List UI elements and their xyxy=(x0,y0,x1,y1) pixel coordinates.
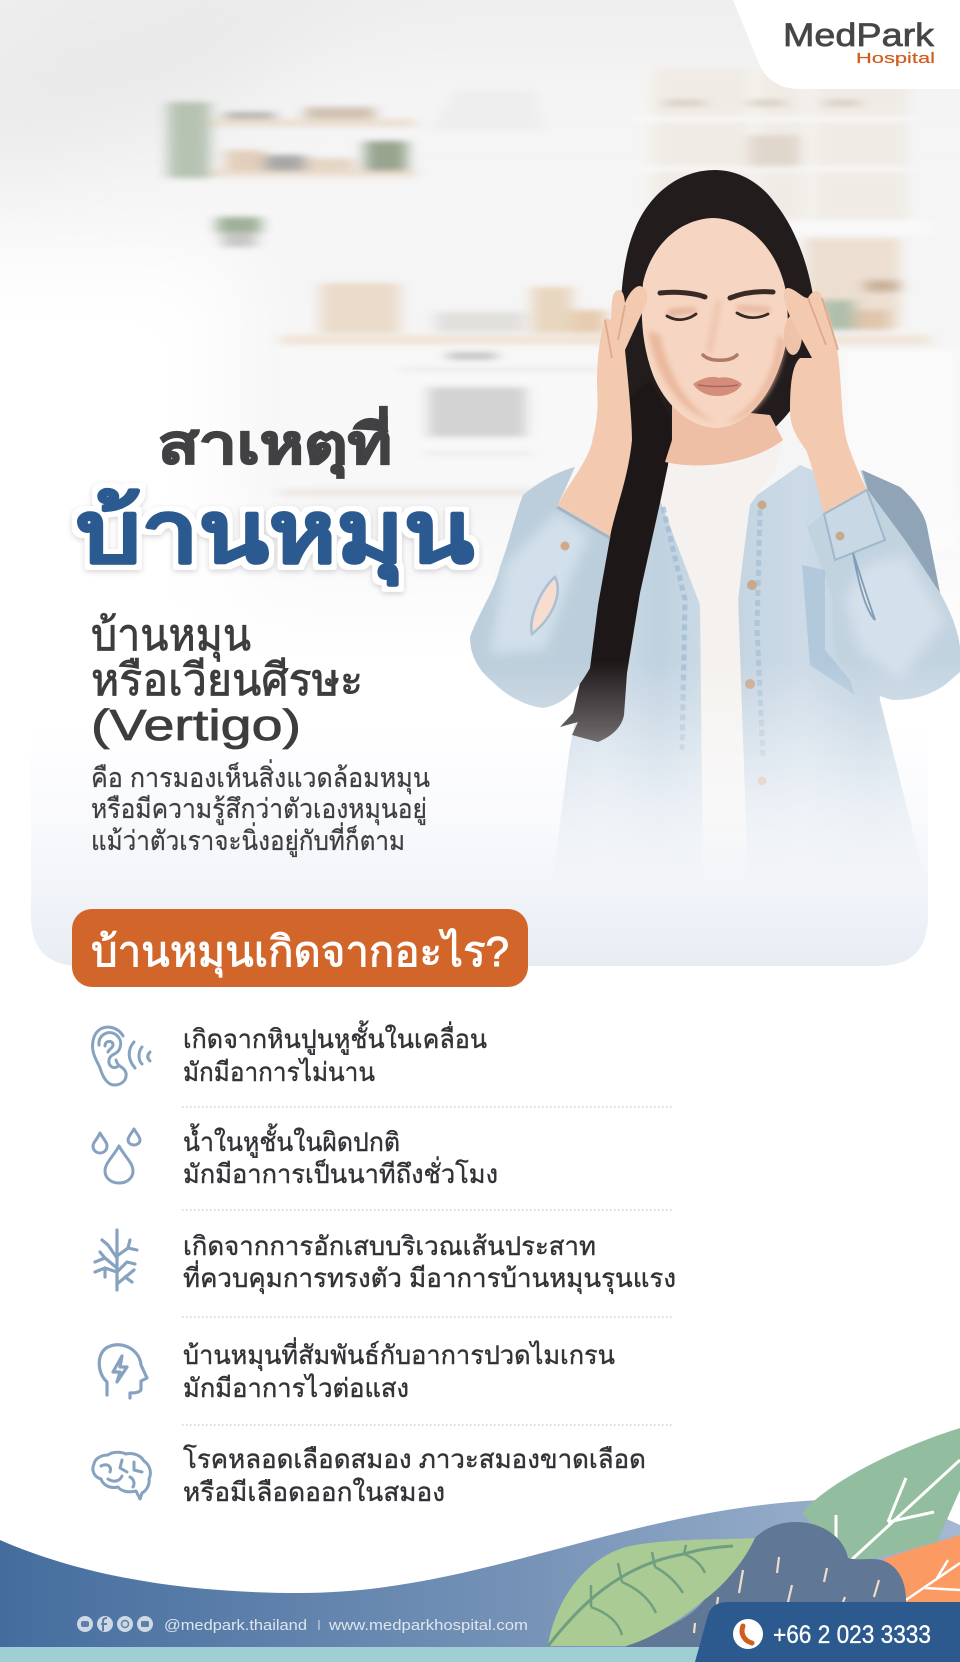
title line: สาเหตุที่: สาเหตุที่ xyxy=(158,406,392,479)
long hair strand xyxy=(560,432,668,742)
section heading: orange pill: บ้านหมุนเกิดจากอะไร? xyxy=(91,928,509,978)
left sleeve opening xyxy=(531,577,558,634)
cause 3 text: เกิดจากการอักเสบบริเวณเส้นประสาท xyxy=(183,1231,596,1261)
white tee xyxy=(660,490,760,830)
white fade over lower background xyxy=(0,480,960,660)
jacket left front xyxy=(550,500,705,900)
lips xyxy=(693,377,742,396)
section heading: orange pill xyxy=(72,909,528,987)
cause 5 text xyxy=(183,1444,646,1507)
social icons xyxy=(77,1616,153,1632)
icon: phone xyxy=(733,1619,763,1649)
right sleeve shadow top xyxy=(862,470,940,593)
cause 2 text: น้ำในหูชั้นในผิดปกติ xyxy=(183,1123,400,1158)
icon: ear with sound waves xyxy=(93,1027,150,1085)
title line: บ้านหมุน: บ้านหมุน xyxy=(76,485,474,586)
phone contact box xyxy=(695,1602,960,1662)
right cuff edge xyxy=(824,490,885,560)
left cuff button xyxy=(560,542,570,550)
definition body text xyxy=(91,759,430,857)
list of causes xyxy=(183,1020,676,1507)
photo: woman holding her temples xyxy=(470,170,960,900)
left cuff edge xyxy=(557,507,610,538)
cause 5 text: หรือมีเลือดออกในสมอง xyxy=(183,1477,445,1507)
footer wave xyxy=(0,1500,960,1662)
cause 1 text xyxy=(183,1020,487,1087)
definition body text: คือ การมองเห็นสิ่งแวดล้อมหมุน xyxy=(91,759,430,795)
eyebrows xyxy=(660,292,773,298)
icon: nerve xyxy=(95,1230,137,1290)
cause 1 text: เกิดจากหินปูนหูชั้นในเคลื่อน xyxy=(183,1020,487,1055)
right sleeve highlight xyxy=(845,555,945,680)
cause 4 text: มักมีอาการไวต่อแสง xyxy=(183,1373,409,1403)
cause 3 text: ที่ควบคุมการทรงตัว มีอาการบ้านหมุนรุนแรง xyxy=(183,1260,676,1294)
icon: head with lightning bolt xyxy=(99,1345,147,1398)
definition heading: บ้านหมุน xyxy=(91,611,251,662)
jacket placket stitching xyxy=(663,507,685,750)
footer decoration: orange leaf xyxy=(882,1535,960,1610)
hand finger shading xyxy=(605,298,838,358)
icon: water drops xyxy=(93,1129,140,1183)
definition heading: (Vertigo) xyxy=(91,701,301,750)
chest pocket xyxy=(802,565,855,695)
right sleeve opening xyxy=(853,553,875,620)
cause 2 text xyxy=(183,1123,498,1189)
website url: www.medparkhospital.com xyxy=(328,1617,528,1634)
definition body text: แม้ว่าตัวเราจะนิ่งอยู่กับที่ก็ตาม xyxy=(91,822,405,857)
jacket right front xyxy=(738,465,913,840)
face xyxy=(642,218,788,428)
logo text: Hospital: Hospital xyxy=(856,50,935,67)
footer decoration: dark blue hill with rain marks xyxy=(625,1522,906,1647)
logo text: MedPark: MedPark xyxy=(783,17,935,53)
panel: rounded gradient card xyxy=(31,720,928,966)
footer decoration: light green leaf xyxy=(548,1538,755,1646)
logo tab xyxy=(733,0,960,89)
cause 1 text: มักมีอาการไม่นาน xyxy=(183,1057,375,1087)
face shading xyxy=(648,300,785,422)
definition heading: หรือเวียนศีรษะ xyxy=(91,656,363,705)
hair back xyxy=(620,170,816,460)
icon: brain xyxy=(93,1452,150,1499)
footer teal strip xyxy=(0,1647,960,1662)
cause 3 text xyxy=(183,1231,676,1294)
nose xyxy=(703,355,737,360)
neck xyxy=(665,405,783,466)
background photo: blurred kitchen xyxy=(0,0,960,730)
cause 4 text xyxy=(183,1337,615,1403)
cause 5 text: โรคหลอดเลือดสมอง ภาวะสมองขาดเลือด xyxy=(183,1444,646,1474)
cause 2 text: มักมีอาการเป็นนาทีถึงชั่วโมง xyxy=(183,1156,498,1189)
cause 4 text: บ้านหมุนที่สัมพันธ์กับอาการปวดไมเกรน xyxy=(183,1337,615,1371)
definition heading xyxy=(91,611,363,750)
phone number: +66 2 023 3333 xyxy=(773,1621,931,1649)
closed eyes xyxy=(667,313,768,320)
right hand and forearm xyxy=(784,288,867,514)
jacket buttons xyxy=(745,500,844,786)
social handle: @medpark.thailand xyxy=(164,1617,307,1634)
footer decoration: large green leaf xyxy=(802,1428,960,1565)
left hand and forearm xyxy=(557,286,647,537)
ear xyxy=(784,315,802,355)
right jacket sleeve xyxy=(807,470,960,700)
white page below photo xyxy=(0,655,960,1662)
left sleeve highlight xyxy=(490,512,590,655)
left jacket sleeve xyxy=(470,467,610,708)
definition body text: หรือมีความรู้สึกว่าตัวเองหมุนอยู่ xyxy=(91,794,427,826)
